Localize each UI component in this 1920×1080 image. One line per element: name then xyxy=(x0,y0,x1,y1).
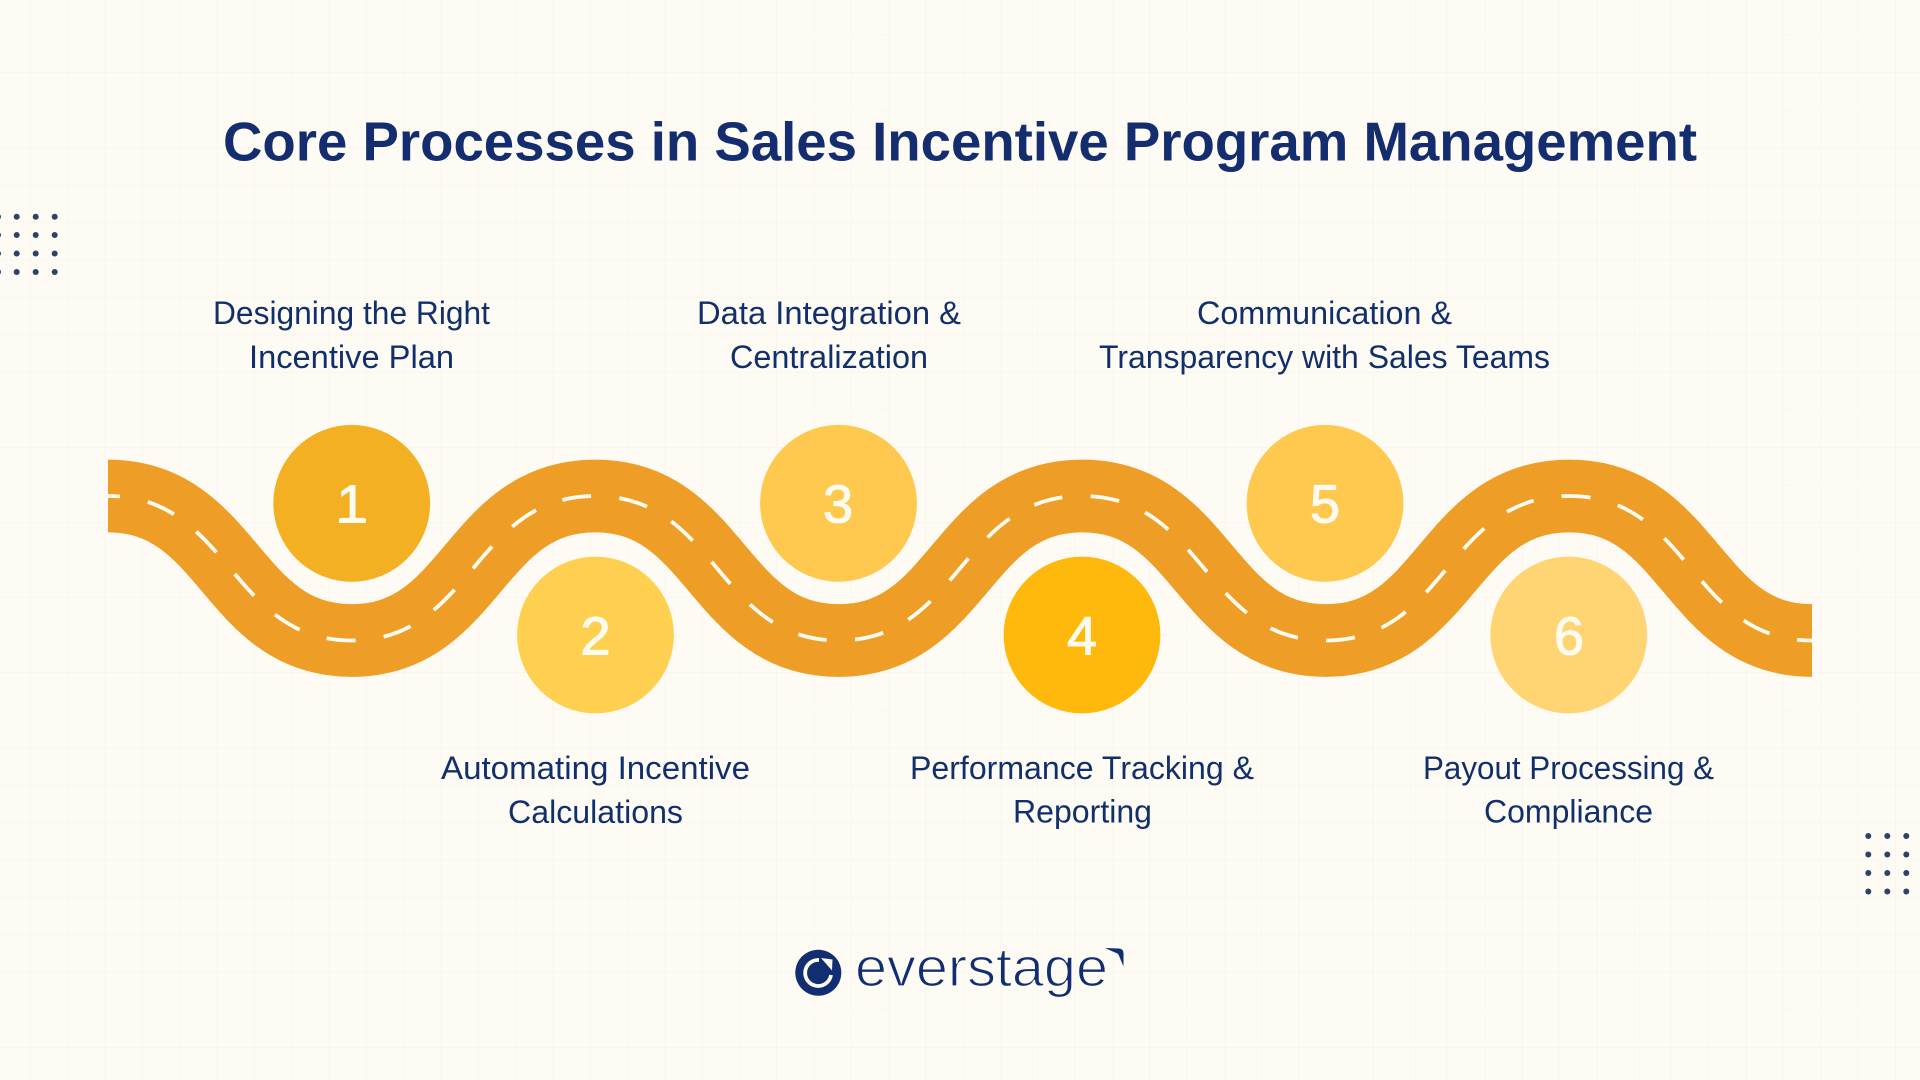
label 2: Automating Incentive xyxy=(441,750,750,786)
label 5 xyxy=(1099,295,1550,375)
step 6: circle: 6 xyxy=(1554,606,1584,666)
label 2: Calculations xyxy=(508,794,683,830)
label 1: Designing the Right xyxy=(213,295,490,331)
step 1: circle: 1 xyxy=(337,475,367,535)
icon: wordmark corner arrow xyxy=(1105,948,1124,966)
icon: logo mark xyxy=(795,950,841,996)
everstage logo xyxy=(795,936,1124,998)
title: Core Processes in Sales Incentive Program Management xyxy=(223,112,1697,172)
step 2: circle: 2 xyxy=(580,606,611,666)
label 3: Centralization xyxy=(730,339,928,375)
label 4: Reporting xyxy=(1013,794,1152,830)
step 2: circle xyxy=(517,557,674,713)
step 6: circle xyxy=(1490,557,1647,713)
wordmark: everstage xyxy=(855,936,1108,998)
step 1: circle xyxy=(273,425,430,582)
step 4: circle: 4 xyxy=(1067,606,1097,666)
label 4: Performance Tracking & xyxy=(910,750,1254,786)
label 2 xyxy=(441,750,750,830)
step 5: circle xyxy=(1247,425,1403,582)
label 6 xyxy=(1423,750,1714,830)
label 3: Data Integration & xyxy=(697,295,961,331)
step 4: circle xyxy=(1004,557,1160,713)
label 6: Payout Processing & xyxy=(1423,750,1714,786)
label 5: Transparency with Sales Teams xyxy=(1099,339,1550,375)
step 5: circle: 5 xyxy=(1310,475,1340,535)
label 6: Compliance xyxy=(1484,794,1653,830)
label 4 xyxy=(910,750,1254,830)
winding road xyxy=(108,496,1812,640)
label 1: Incentive Plan xyxy=(249,339,454,375)
step 3: circle: 3 xyxy=(823,475,853,535)
label 5: Communication & xyxy=(1197,295,1452,331)
step 3: circle xyxy=(760,425,917,582)
label 3 xyxy=(697,295,961,375)
decorative dots: top left xyxy=(0,214,58,275)
label 1 xyxy=(213,295,490,375)
decorative dots: bottom right xyxy=(1865,833,1909,894)
